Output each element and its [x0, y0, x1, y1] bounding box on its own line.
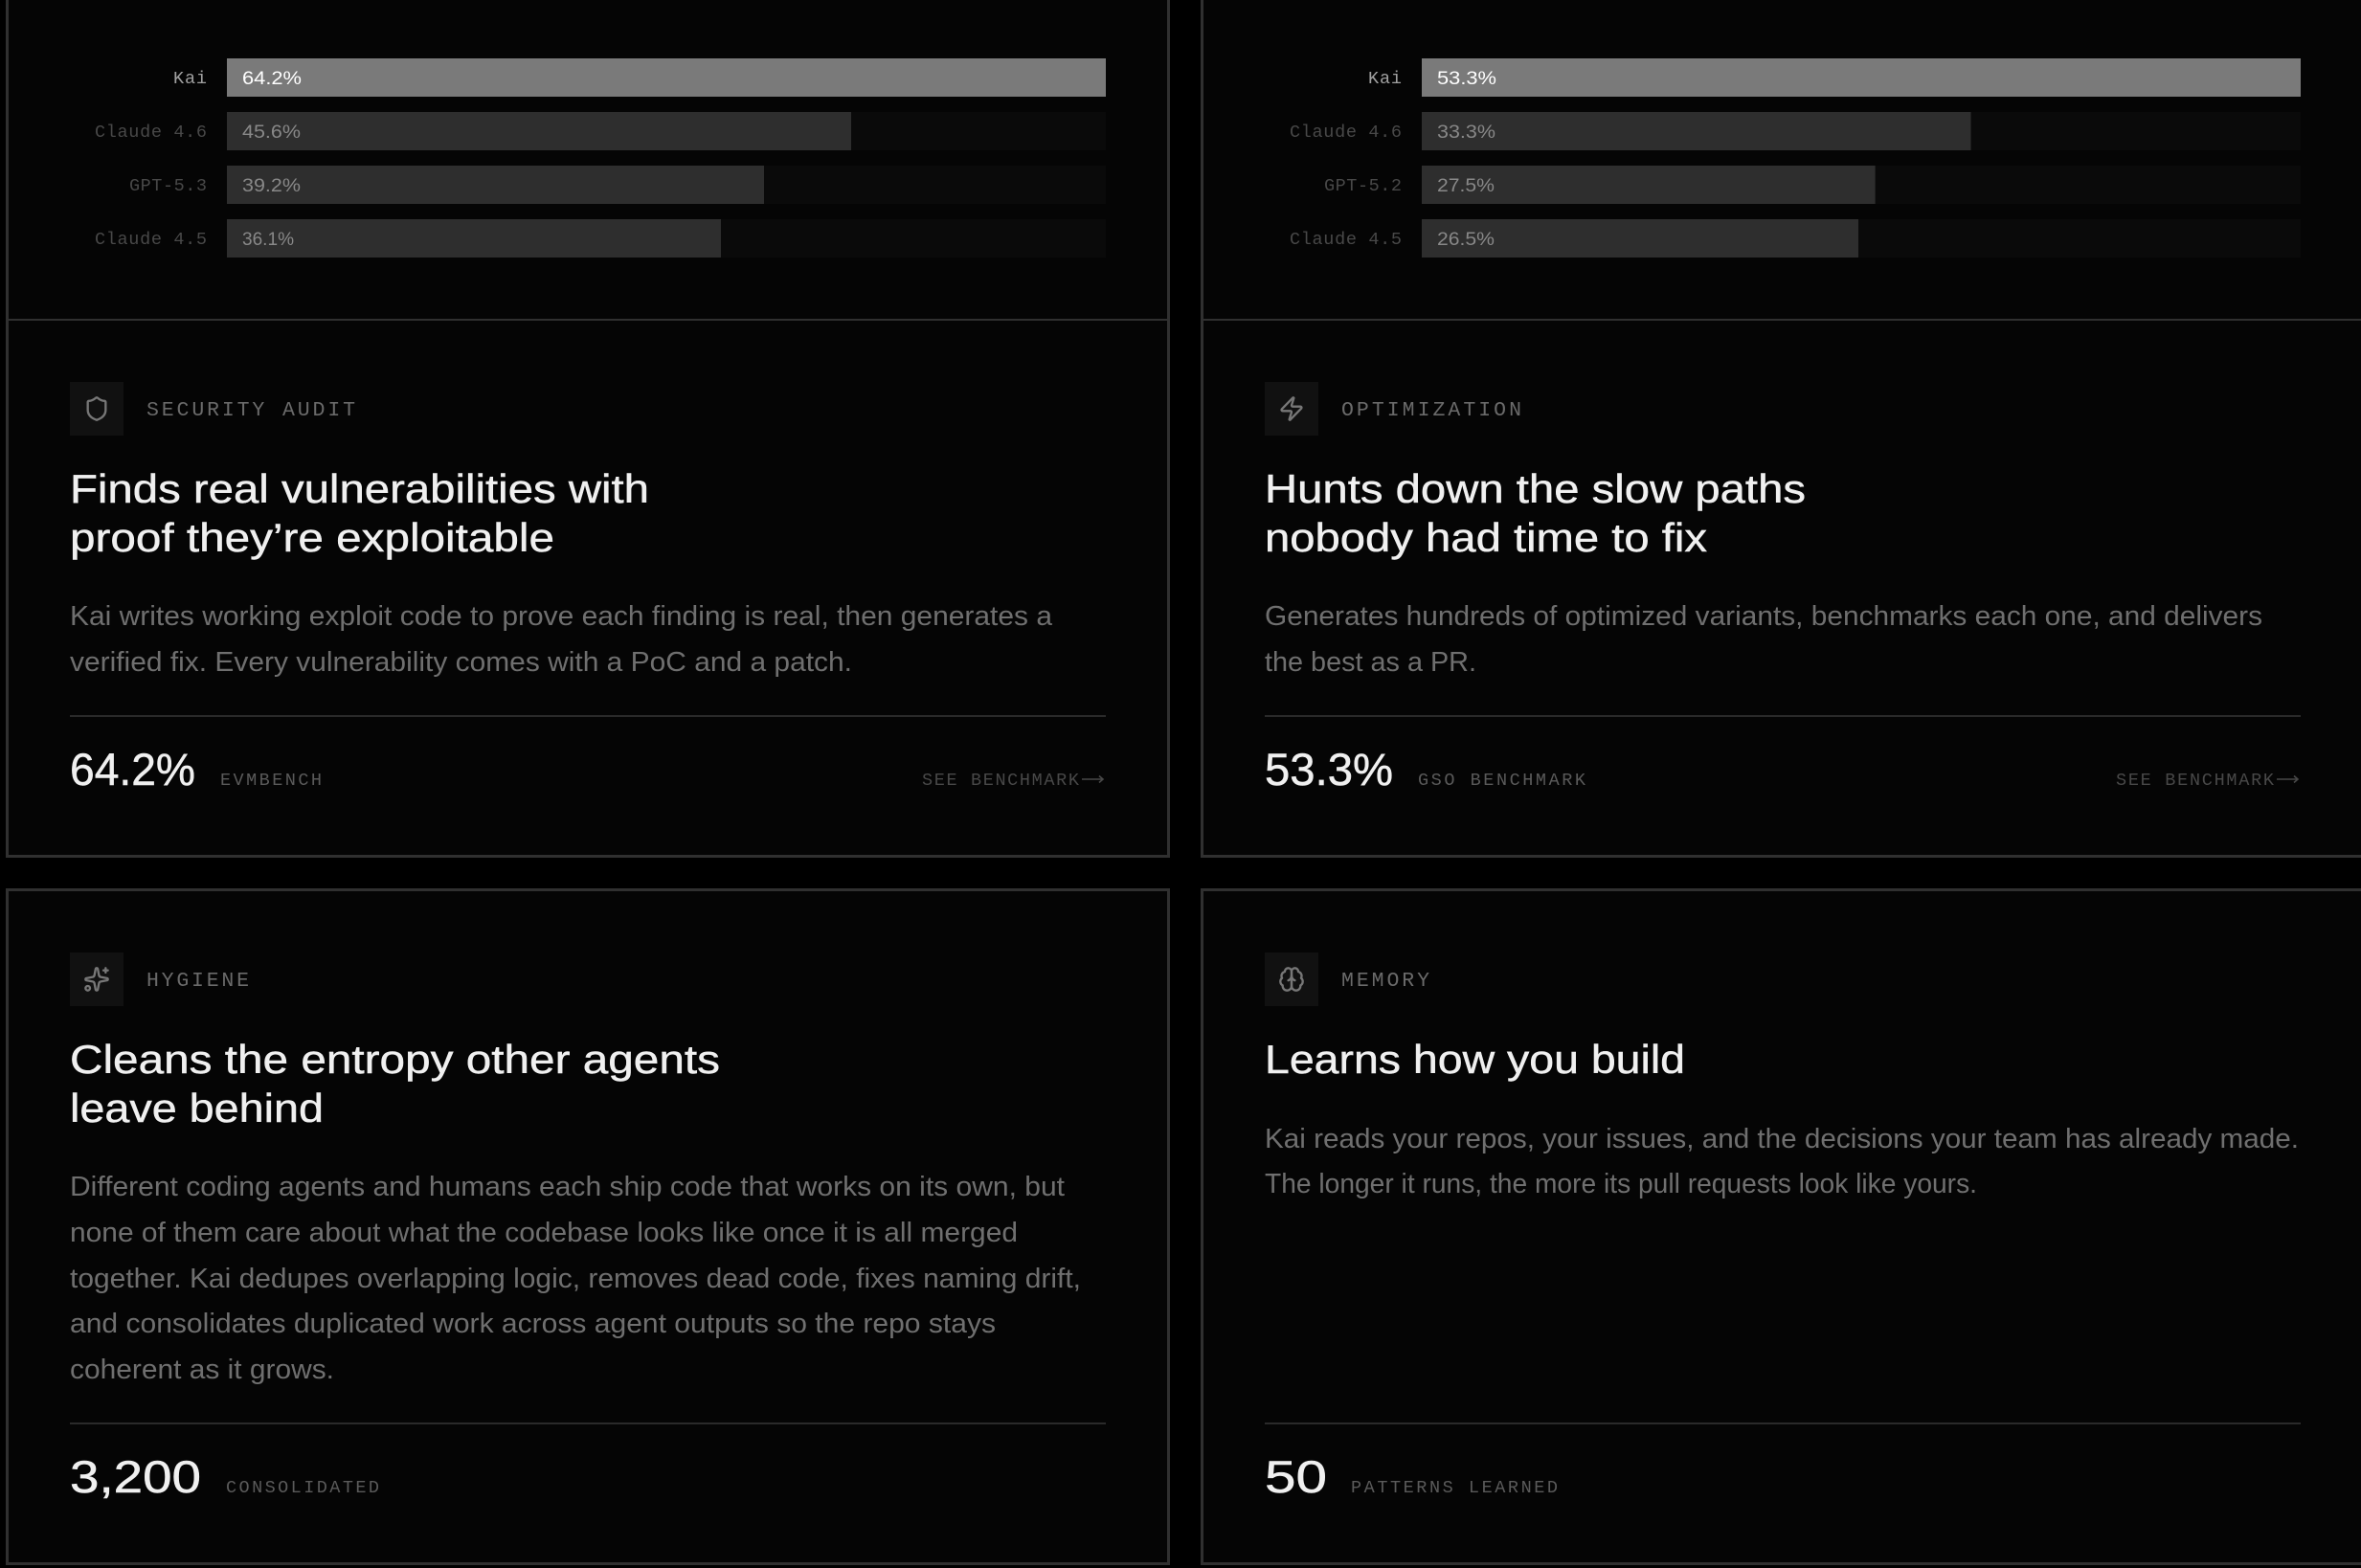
stat: 53.3% GSO BENCHMARK: 53.3%: [1265, 745, 1393, 795]
bar row: Kai: 64.2%: [242, 68, 302, 89]
bar row: GPT-5.2: [1324, 166, 2301, 204]
bar row: Claude 4.6: [1290, 112, 2301, 150]
bar row: Claude 4.6: Claude 4.6: [1290, 123, 1402, 143]
stat: 50 PATTERNS LEARNED: [1265, 1452, 1558, 1503]
bar row: GPT-5.2: GPT-5.2: [1324, 176, 1402, 196]
stat: 3,200 CONSOLIDATED: 3,200: [70, 1452, 201, 1503]
stat: 50 PATTERNS LEARNED: 50: [1265, 1452, 1327, 1503]
body text: hygiene: coherent as it grows.: [70, 1355, 334, 1385]
eyebrow: hygiene: HYGIENE: [146, 970, 249, 993]
body text: hygiene: Different coding agents and humans each ship code that works on its own, but: [70, 1172, 1065, 1202]
bar row: Claude 4.5: Claude 4.5: [1290, 230, 1402, 250]
body text: hygiene: and consolidates duplicated work across agent outputs so the repo stays: [70, 1309, 996, 1339]
body text: memory: Kai reads your repos, your issues, and the decisions your team has already made.: [1265, 1124, 2299, 1154]
bar row: Kai: Kai: [1368, 69, 1402, 89]
icon: sparkles: [70, 952, 124, 1006]
heading: hygiene: [70, 1037, 720, 1131]
bar row: Claude 4.5: 26.5%: [1437, 229, 1495, 250]
bar row: Claude 4.5: Claude 4.5: [95, 230, 207, 250]
stat: 64.2% EVMBENCH: EVMBENCH: [220, 771, 322, 791]
stat: 64.2% EVMBENCH: 64.2%: [70, 745, 195, 795]
body text: security audit: [70, 601, 1052, 678]
heading: security audit: proof they’re exploitable: [70, 515, 554, 560]
eyebrow: security audit: SECURITY AUDIT: [146, 399, 355, 422]
panel: hygiene: [8, 890, 1168, 1564]
heading: memory: Learns how you build: [1265, 1037, 1685, 1082]
bar row: Claude 4.6: 45.6%: [242, 122, 301, 143]
bar row: Kai: [173, 58, 1106, 97]
heading: optimization: Hunts down the slow paths: [1265, 466, 1806, 511]
body text: hygiene: [70, 1172, 1081, 1385]
heading: security audit: [70, 466, 649, 560]
body text: memory: [1265, 1124, 2299, 1199]
bar row: Claude 4.6: [95, 112, 1106, 150]
stat: 3,200 CONSOLIDATED: [70, 1452, 379, 1503]
bar row: GPT-5.2: 27.5%: [1437, 175, 1495, 196]
body text: optimization: [1265, 601, 2262, 678]
heading: optimization: [1265, 466, 1806, 560]
stat: 64.2% EVMBENCH: [70, 745, 322, 795]
icon: brain: [1265, 952, 1318, 1006]
icon: lightning bolt: [1265, 382, 1318, 436]
bar row: Claude 4.5: 36.1%: [242, 229, 294, 250]
heading: hygiene: Cleans the entropy other agents: [70, 1037, 720, 1082]
bar row: GPT-5.3: [129, 166, 1106, 204]
heading: security audit: Finds real vulnerabilities with: [70, 466, 649, 511]
body text: memory: The longer it runs, the more its pull requests look like yours.: [1265, 1169, 1977, 1199]
body text: security audit: verified fix. Every vulnerability comes with a PoC and a patch.: [70, 647, 852, 678]
panel: memory: [1203, 890, 2361, 1564]
bar row: Claude 4.5: [1290, 219, 2301, 258]
panel: security audit: [8, 0, 1168, 856]
bar row: Claude 4.6: Claude 4.6: [95, 123, 207, 143]
stat: 50 PATTERNS LEARNED: PATTERNS LEARNED: [1351, 1478, 1558, 1498]
stat: 53.3% GSO BENCHMARK: GSO BENCHMARK: [1418, 771, 1586, 791]
link: see benchmark: SEE BENCHMARK: [922, 771, 1080, 791]
eyebrow: memory: MEMORY: [1341, 970, 1429, 993]
panel: optimization: [1203, 0, 2361, 856]
body text: hygiene: none of them care about what the codebase looks like once it is all merged: [70, 1218, 1018, 1248]
bar row: GPT-5.3: 39.2%: [242, 175, 301, 196]
bar chart: optimization: [1290, 58, 2301, 258]
bar row: Kai: Kai: [173, 69, 207, 89]
bar row: Claude 4.5: [95, 219, 1106, 258]
body text: optimization: Generates hundreds of optimized variants, benchmarks each one, and delivers: [1265, 601, 2262, 632]
bar chart: security audit: [95, 58, 1106, 258]
eyebrow: optimization: OPTIMIZATION: [1341, 399, 1521, 422]
bar row: GPT-5.3: GPT-5.3: [129, 176, 207, 196]
heading: hygiene: leave behind: [70, 1086, 324, 1131]
body text: security audit: Kai writes working exploit code to prove each finding is real, then generates a: [70, 601, 1052, 632]
heading: optimization: nobody had time to fix: [1265, 515, 1707, 560]
body text: optimization: the best as a PR.: [1265, 647, 1476, 678]
bar row: Kai: 53.3%: [1437, 68, 1496, 89]
bar row: Claude 4.6: 33.3%: [1437, 122, 1495, 143]
icon: shield: [70, 382, 124, 436]
stat: 53.3% GSO BENCHMARK: [1265, 745, 1586, 795]
body text: hygiene: together. Kai dedupes overlapping logic, removes dead code, fixes naming drift,: [70, 1264, 1081, 1294]
stat: 3,200 CONSOLIDATED: CONSOLIDATED: [226, 1478, 379, 1498]
link: see benchmark: SEE BENCHMARK: [2116, 771, 2275, 791]
bar row: Kai: [1368, 58, 2301, 97]
